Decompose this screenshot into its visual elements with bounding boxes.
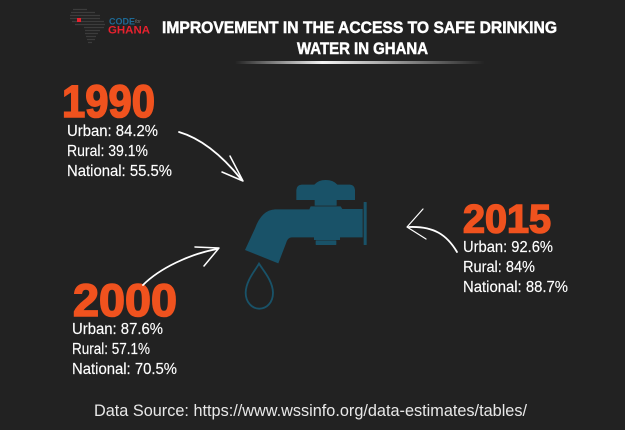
tap wall flange (364, 202, 367, 245)
panel: 1990 (62, 76, 172, 180)
tap stem (315, 200, 337, 206)
icon: Africa map (70, 10, 105, 42)
logo wordmark: for: for (135, 19, 141, 25)
year 2000: 2000 (73, 275, 177, 326)
tap body and spout (245, 206, 363, 263)
stats 2000: Rural: 57.1% (72, 341, 150, 358)
data source: Data Source: https://www.wssinfo.org/data-estimates/tables/ (94, 401, 527, 420)
stats 2015: Rural: 84% (463, 259, 535, 276)
title: WATER IN GHANA (297, 39, 428, 58)
tap handle (296, 180, 355, 200)
stats 1990 (67, 123, 172, 180)
arrow: 2015 to tap (407, 209, 457, 252)
arrow: 1990 to tap (179, 132, 243, 181)
year 1990: 1990 (62, 76, 155, 127)
stats 1990: Urban: 84.2% (67, 123, 158, 140)
stats 1990: Rural: 39.1% (67, 143, 148, 160)
arrow: 2000 to tap (143, 247, 219, 285)
stats 1990: National: 55.5% (67, 163, 172, 180)
stats 2015 (463, 239, 568, 296)
panel: 2000 (72, 275, 177, 378)
logo wordmark: Ghana: GHANA (108, 24, 150, 36)
icon: red square (77, 18, 81, 22)
stats 2000 (72, 321, 177, 378)
title (162, 18, 557, 58)
title: IMPROVEMENT IN THE ACCESS TO SAFE DRINKING (162, 18, 557, 37)
stats 2015: National: 88.7% (463, 279, 568, 296)
icon: water tap (245, 180, 367, 309)
tap collar (316, 240, 336, 245)
logo wordmark: code: CODE (109, 16, 135, 26)
title underline (235, 61, 485, 64)
stats 2015: Urban: 92.6% (463, 239, 553, 256)
year 2015: 2015 (463, 198, 551, 242)
stats 2000: National: 70.5% (72, 361, 177, 378)
logo: Code for Ghana (70, 10, 150, 42)
water drop (246, 264, 273, 309)
panel: 2015 (463, 198, 568, 296)
stats 2000: Urban: 87.6% (72, 321, 163, 338)
